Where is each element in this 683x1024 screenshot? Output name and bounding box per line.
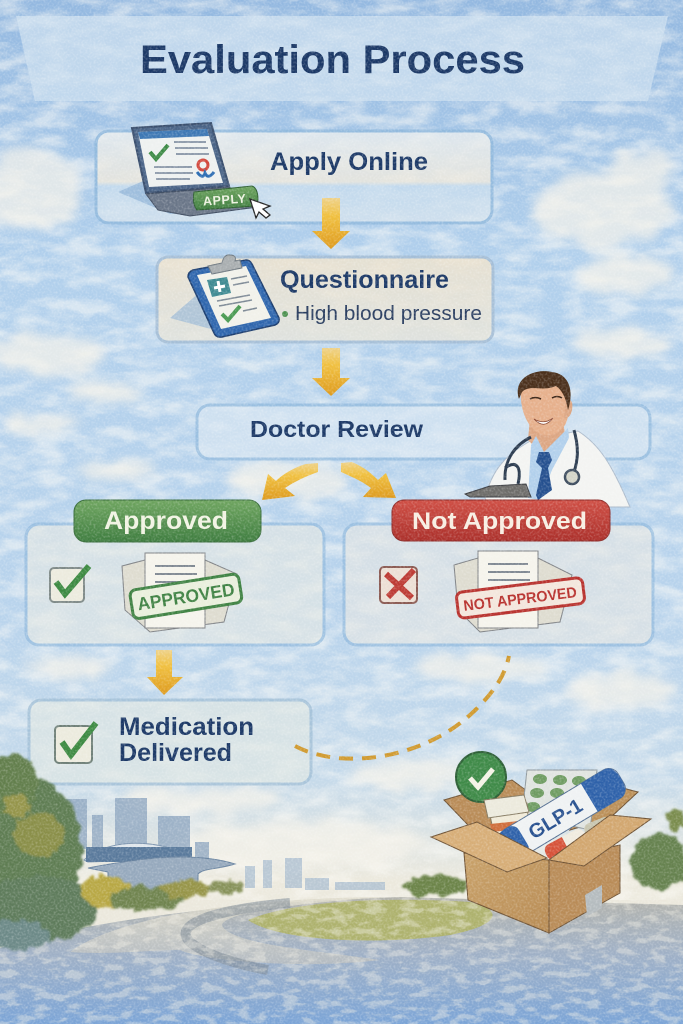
label: Doctor Review [250,416,423,442]
arrow: approved to medication [147,650,183,695]
box body [464,853,549,933]
laptop shadow [118,178,200,214]
box front flaps [431,822,547,872]
ground [0,897,683,1024]
blister pack [522,770,597,830]
box back flaps [444,780,560,850]
arrow: apply to questionnaire [312,198,350,249]
road dark strip [186,903,290,970]
apply button: APPLY [203,192,247,209]
approved badge [74,500,261,542]
apply button [193,186,258,210]
not approved badge [392,500,610,541]
icon: checkbox [50,566,89,602]
label [119,713,254,767]
icon: not approved documents [454,551,585,632]
panel: doctor review [197,405,650,459]
approved badge: Approved [104,507,228,535]
icon: x checkbox [380,567,417,603]
arrow: to not approved [341,462,396,498]
icon: checkbox [55,723,96,763]
arrow: questionnaire to doctor review [312,348,350,396]
dashed delivery path [295,656,509,759]
icon: clipboard [170,255,279,337]
panel: apply online [96,123,492,223]
arrow: to approved [262,463,318,500]
not approved badge: Not Approved [412,508,587,535]
cream pill [582,815,614,839]
panel: medication delivered [29,700,311,784]
label: Medication [119,713,254,741]
trees right [403,808,683,897]
label: Delivered [119,739,232,767]
box label [585,885,602,916]
list item: High blood pressure [295,303,482,325]
trees left [0,755,242,950]
doctor illustration [465,371,630,507]
icon: not approved documents: NOT APPROVED [463,584,578,615]
panel: approved [26,500,324,645]
GLP-1 pen [496,764,630,863]
ground mottling [0,895,683,1024]
icon: approved documents: APPROVED [136,579,236,614]
heading: Questionnaire [280,266,449,294]
medication box [431,752,651,933]
GLP-1 pen: GLP-1 [525,795,587,844]
landscape [0,755,683,1024]
panel: questionnaire [157,255,493,342]
road [70,897,385,964]
grass [248,900,493,940]
pill bottle [484,795,530,848]
building [84,843,235,892]
panel: not approved [344,500,653,645]
label: Apply Online [270,148,428,176]
title: Evaluation Process [140,38,525,82]
city skyline [60,798,209,862]
title banner [16,16,668,101]
icon: green check circle [456,752,506,802]
icon: laptop [132,123,258,216]
icon: cursor [250,199,270,218]
red pill [542,827,589,862]
icon: approved documents [122,553,243,632]
